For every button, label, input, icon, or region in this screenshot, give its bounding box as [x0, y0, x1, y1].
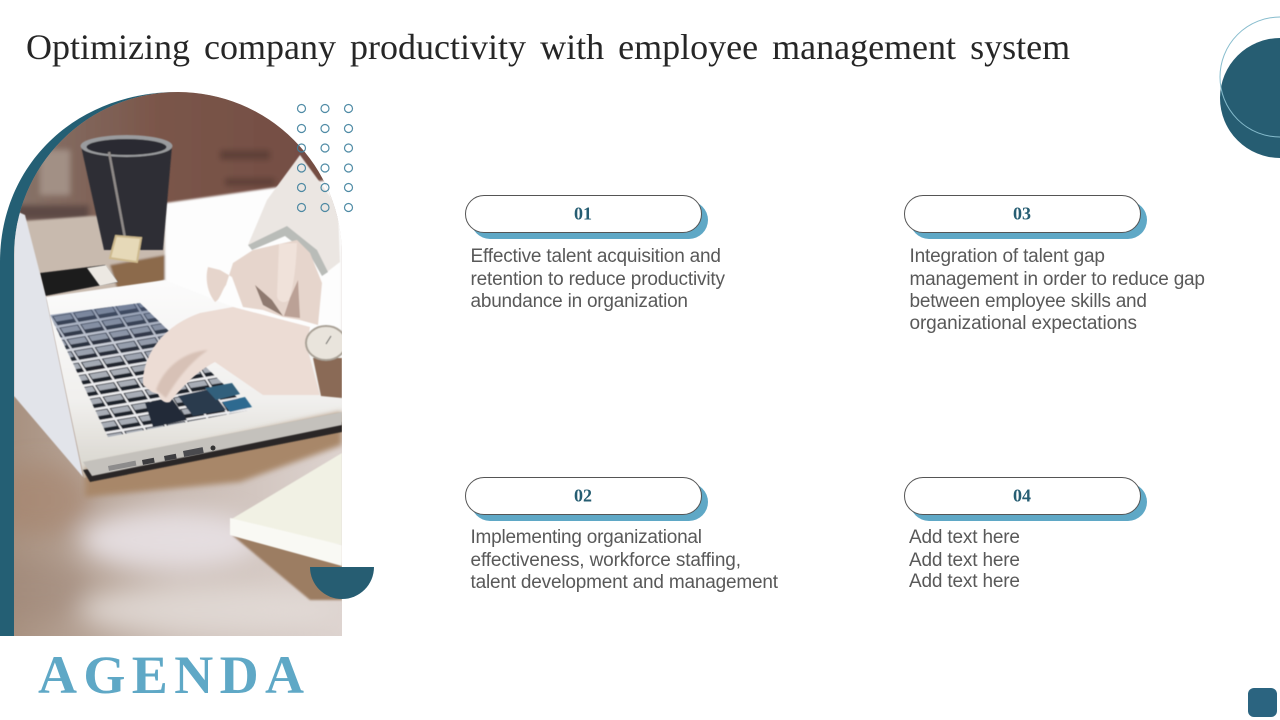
- text 03: Integration of talent gap: [910, 246, 1105, 267]
- title: Optimizing company productivity with employee management system: [26, 27, 1070, 67]
- laptop body: [14, 210, 342, 497]
- text 04: Add text here: [909, 550, 1020, 571]
- brick wall background: [10, 85, 346, 221]
- text 03: management in order to reduce gap: [910, 269, 1205, 290]
- photo: laptop on desk: [0, 85, 346, 636]
- agenda heading: AGENDA: [38, 645, 304, 705]
- corner square: [1248, 688, 1277, 717]
- text 02: talent development and management: [470, 572, 779, 593]
- text 03: between employee skills and: [910, 291, 1147, 312]
- desk surface behind laptop: [14, 178, 342, 420]
- item 01: [466, 196, 730, 312]
- teal arch behind photo: [0, 92, 178, 636]
- text 01: Effective talent acquisition and: [470, 246, 721, 267]
- keyboard: [50, 302, 252, 438]
- wristwatch: [306, 326, 346, 398]
- pill 04: 04: [1013, 486, 1031, 506]
- pill 03: 03: [1013, 204, 1031, 224]
- pill 01: 01: [574, 204, 592, 224]
- item 03: [904, 196, 1210, 334]
- pill 02: 02: [574, 486, 592, 506]
- text 03: organizational expectations: [910, 313, 1137, 334]
- lower hand: [143, 307, 320, 403]
- text 02: Implementing organizational: [470, 527, 702, 548]
- item 04: [904, 478, 1147, 592]
- wood grain tones: [14, 464, 316, 636]
- text 04: Add text here: [909, 527, 1020, 548]
- pill 02: [466, 478, 708, 521]
- text 04: Add text here: [909, 571, 1020, 592]
- notebook on desk: [230, 453, 342, 600]
- text 01: abundance in organization: [470, 291, 688, 312]
- pill 03: [904, 196, 1147, 239]
- sleeve and upper hand: [207, 155, 340, 325]
- pill 04: [904, 478, 1147, 521]
- text 02: effectiveness, workforce staffing,: [470, 550, 741, 571]
- item 02: [466, 478, 779, 593]
- phone: [40, 265, 118, 296]
- dot grid: [298, 104, 352, 212]
- coffee cup: [80, 135, 172, 262]
- half circle accent: [310, 567, 374, 599]
- pill 01: [466, 196, 708, 239]
- text 01: retention to reduce productivity: [470, 269, 726, 290]
- decorative circles top right: [1220, 17, 1280, 158]
